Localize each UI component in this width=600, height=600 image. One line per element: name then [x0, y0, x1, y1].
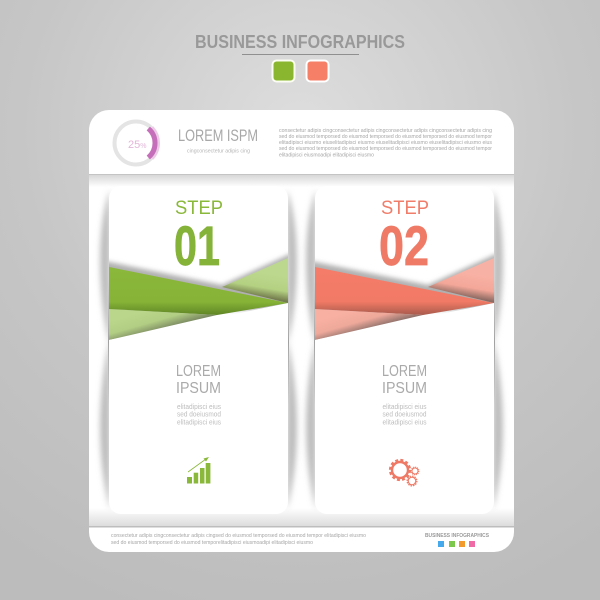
heading: IPSUM [176, 380, 221, 397]
text block: footer paragraph [111, 533, 366, 546]
text block: header paragraph [279, 128, 492, 158]
panel: header [114, 122, 492, 164]
text block [177, 402, 221, 426]
text block: header paragraph: elitadipisci eiusmo eiuselitadipisci eiusmo eiuselitadipisci eiusmo eiuselitadipisci eiusmo eius [279, 140, 492, 146]
step label: STEP [381, 197, 429, 219]
icon: gears [390, 460, 419, 486]
heading: LOREM [382, 363, 427, 380]
icon: 25 percent ring: 25% [128, 139, 146, 151]
step label: STEP [175, 197, 223, 219]
text block: elitadipisci eius [382, 418, 427, 426]
title: BUSINESS INFOGRAPHICS [195, 31, 405, 52]
heading: IPSUM [382, 380, 427, 397]
panel: step 02 [311, 186, 498, 514]
footer badge: BUSINESS INFOGRAPHICS [425, 533, 489, 539]
panel: footer [111, 533, 489, 547]
text block: elitadipisci eius [382, 402, 427, 411]
icon: green swatch [272, 60, 294, 82]
text block: header paragraph: elitadipisci eiusmoadipi elitadipisci eiusmo [279, 152, 374, 158]
text block: elitadipisci eius [177, 418, 221, 426]
text block: header paragraph: sed do eiusmod temporsed do eiusmod temporsed do eiusmod temporsed do eiusmod tempor [279, 146, 492, 152]
icon: coral swatch [306, 60, 328, 82]
text block: footer paragraph: sed do eiusmod temporsed do eiusmod temporelitadipisci eiusmoadipi elitadipisci eiusmo [111, 540, 313, 546]
step number: 01 [174, 214, 220, 277]
chevron bands: green [105, 253, 292, 345]
text block: sed doeiusmod [382, 410, 426, 418]
text block [382, 402, 427, 426]
heading: lorem ispm: LOREM ISPM [178, 126, 258, 145]
text block: elitadipisci eius [177, 402, 221, 411]
heading [176, 363, 221, 397]
step number: 02 [379, 214, 429, 277]
heading: LOREM [176, 363, 221, 380]
chevron bands: coral [311, 253, 498, 345]
text block: header paragraph: sed do eiusmod temporsed do eiusmod temporsed do eiusmod temporsed do eiusmod tempor [279, 134, 492, 140]
panel: step 01 [105, 186, 292, 514]
text block: footer paragraph: consectetur adipis cingconsectetur adipis cingsed do eiusmod temporsed do eiusmod tempor elitadipisci eiusmo [111, 533, 366, 539]
subheading: cingconsectetur adipis cing [187, 148, 250, 154]
icon: bar chart with arrow [187, 457, 210, 484]
text block: header paragraph: consectetur adipis cingconsectetur adipis cingconsectetur adipis cingconsectetur adipis cing [279, 128, 492, 134]
panel: main card [89, 110, 514, 552]
footer badge [425, 533, 489, 547]
text block: sed doeiusmod [177, 410, 221, 418]
heading [382, 363, 427, 397]
icon: 25 percent ring [114, 122, 158, 164]
